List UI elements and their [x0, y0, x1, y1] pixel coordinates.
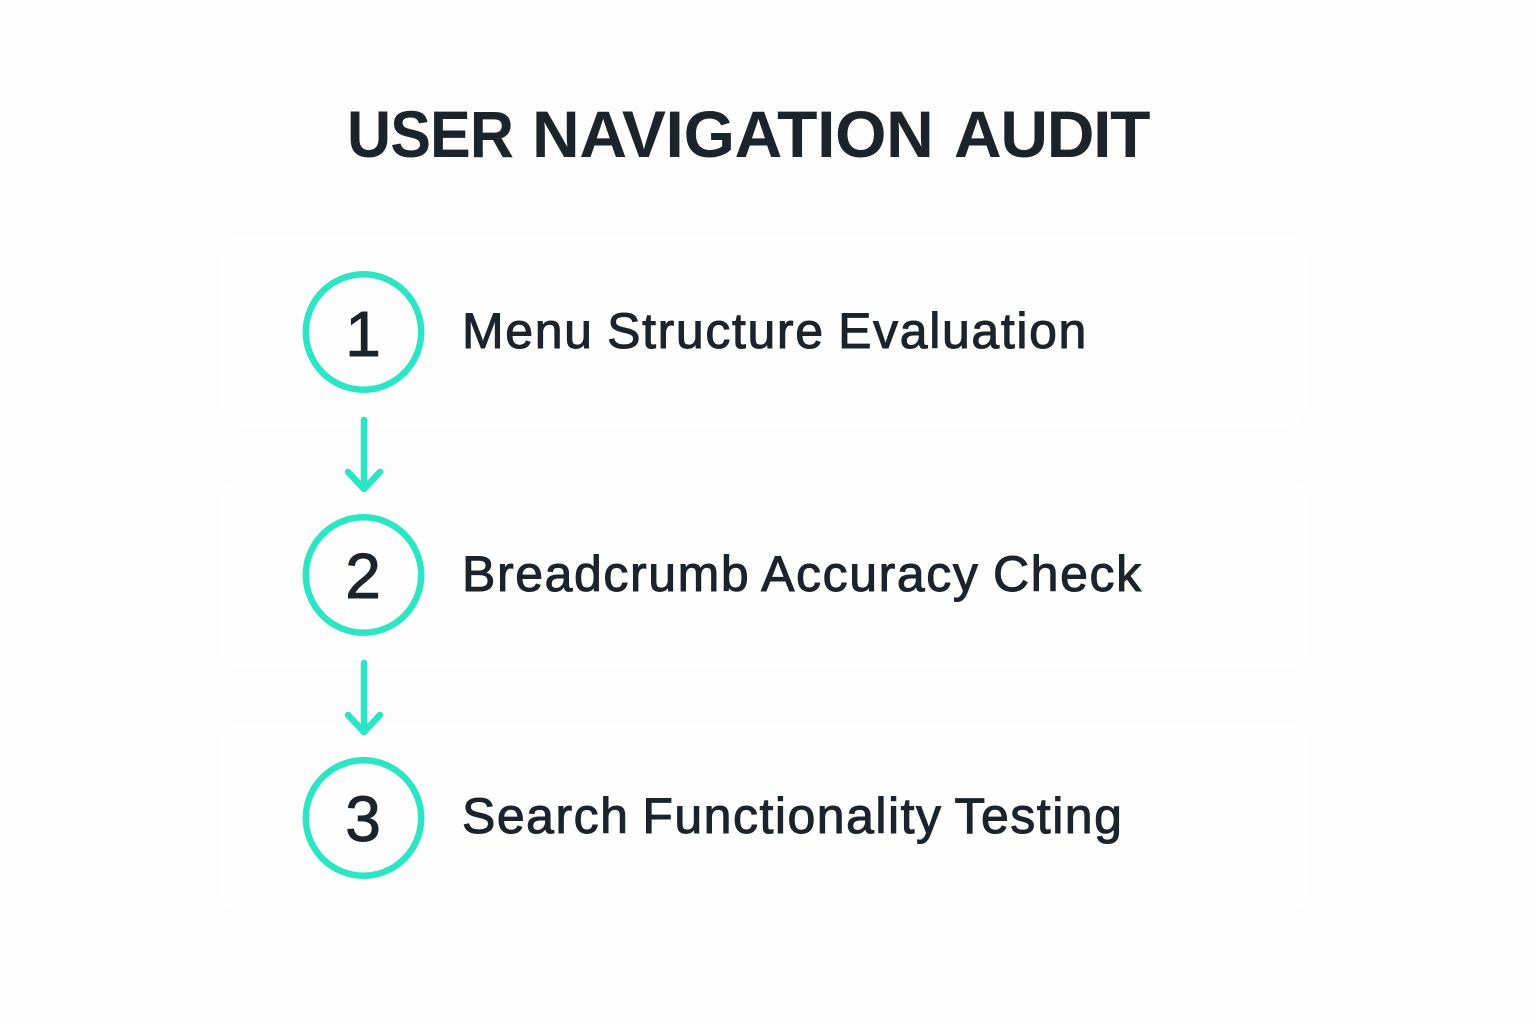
icon: number circle 2 — [306, 517, 421, 633]
icon: number circle 1 — [306, 274, 421, 390]
step 1 label: Menu Structure Evaluation — [462, 303, 1088, 359]
panel: step 2 card — [218, 479, 1310, 670]
step 2 label: Breadcrumb Accuracy Check — [462, 546, 1143, 602]
title — [347, 97, 1150, 171]
panel: step 3 card — [218, 722, 1310, 913]
panel: step 1 card — [218, 236, 1310, 427]
icon: number circle 3: 3 — [345, 783, 381, 855]
title: NAVIGATION — [532, 97, 934, 171]
icon: number circle 2: 2 — [345, 540, 381, 612]
title: AUDIT — [954, 97, 1149, 171]
arrow: step 1 to step 2 — [348, 420, 380, 489]
icon: number circle 3 — [306, 760, 421, 876]
icon: number circle 1: 1 — [345, 298, 381, 370]
title: USER — [347, 97, 513, 171]
step 3 label: Search Functionality Testing — [462, 788, 1123, 844]
arrow: step 2 to step 3 — [348, 663, 380, 732]
